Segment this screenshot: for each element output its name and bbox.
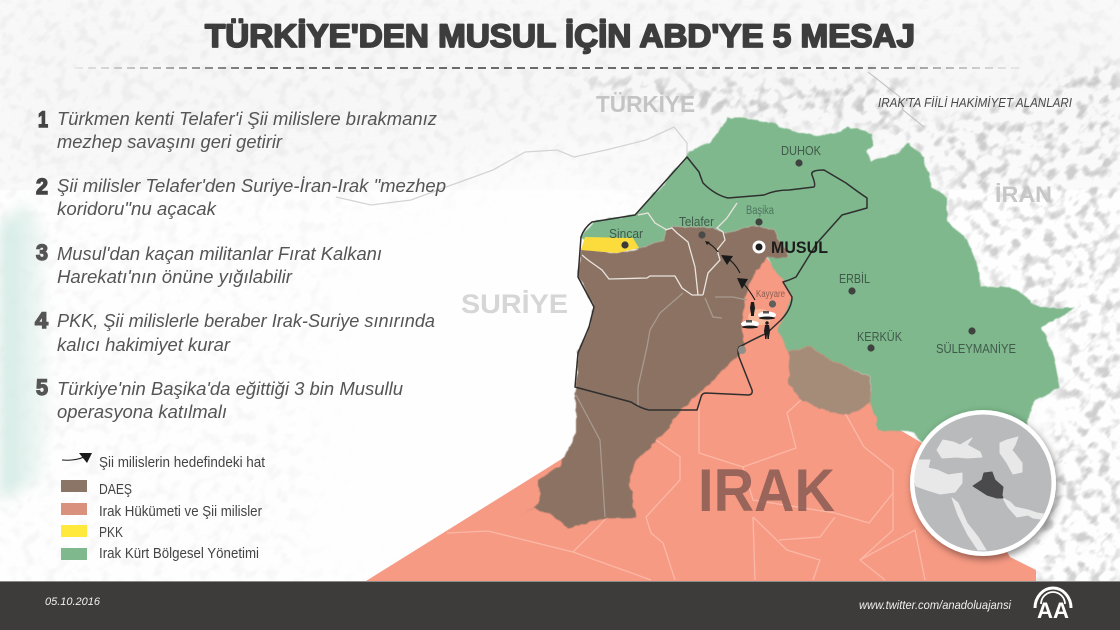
city: Duhok: DUHOK (781, 143, 821, 158)
message 2: Şii milisler Telafer'den Suriye-İran-Irak "mezhep (57, 176, 446, 196)
region: ISIS, main area (520, 225, 789, 527)
message 5: Türkiye'nin Başika'da eğittiği 3 bin Musullu (57, 379, 403, 399)
city: Kayyare: Kayyare (756, 289, 785, 300)
message 4: kalıcı hakimiyet kurar (57, 335, 231, 355)
city: Süleymaniye (936, 327, 1016, 356)
message 3: 3 (36, 240, 48, 265)
region: ISIS, southern area (789, 347, 871, 415)
Caspian Sea (1000, 437, 1022, 474)
message 3: Musul'dan kaçan militanlar Fırat Kalkanı (57, 244, 382, 264)
message 5: operasyona katılmalı (57, 402, 227, 422)
icons: soldiers and vehicles (741, 302, 776, 339)
country label: Türkiye: TÜRKİYE (596, 91, 695, 117)
city: Sincar: Sincar (609, 226, 644, 241)
city: Kayyare (756, 289, 785, 308)
date: 05.10.2016 (45, 596, 101, 608)
legend: PKK (61, 524, 123, 541)
city: Mosul: MUSUL (771, 238, 828, 257)
city: Erbil (839, 271, 870, 295)
message 1: 1 (38, 107, 48, 132)
legend: DAEŞ (61, 480, 132, 498)
footer bar (0, 581, 1120, 630)
map of Iraq (366, 118, 1074, 581)
message 4 (35, 308, 435, 355)
message 2: koridoru"nu açacak (57, 199, 217, 219)
legend: Irak government: Irak Hükümeti ve Şii milisler (99, 503, 262, 520)
roads and borders (576, 203, 747, 517)
city: Başika: Başika (746, 205, 774, 217)
message 3: Harekatı'nın önüne yığılabilir (57, 267, 293, 287)
region: PKK (581, 237, 639, 253)
locator globe (910, 410, 1056, 556)
title: TÜRKİYE'DEN MUSUL İÇİN ABD'YE 5 MESAJ (205, 18, 915, 54)
logo: Anadolu Agency (1035, 588, 1071, 623)
message 5: 5 (36, 375, 48, 400)
message 4: PKK, Şii milislerle beraber Irak-Suriye sınırında (57, 311, 435, 331)
legend: PKK: PKK (99, 524, 123, 541)
message 5 (36, 375, 403, 422)
city: Kerkük: KERKÜK (857, 329, 902, 344)
city: Erbil: ERBİL (839, 271, 870, 286)
message 1: Türkmen kenti Telafer'i Şii milislere bırakmanız (57, 109, 437, 129)
region: Kurdistan Regional Government (581, 118, 1074, 445)
legend: KRG: Irak Kürt Bölgesel Yönetimi (99, 545, 259, 562)
legend: DAEŞ: DAEŞ (99, 481, 132, 498)
map heading: IRAK'TA FİİLİ HAKİMİYET ALANLARI (878, 95, 1072, 110)
message 1 (38, 107, 437, 152)
Mediterranean Sea (914, 460, 962, 494)
front line (575, 157, 867, 410)
provincial borders (447, 400, 925, 580)
country label: Suriye: SURİYE (461, 289, 568, 319)
logo: Anadolu Agency: AA (1037, 598, 1069, 623)
arrows: Shia militia advance (705, 241, 755, 300)
message 4: 4 (35, 308, 49, 333)
Iraq highlight (973, 472, 1003, 498)
twitter url: www.twitter.com/anadoluajansi (859, 598, 1011, 612)
city: Duhok (781, 143, 821, 167)
title divider (75, 67, 1020, 69)
message 2: 2 (36, 174, 48, 199)
message 1: mezhep savaşını geri getirir (57, 132, 283, 152)
city: Başika (746, 205, 774, 226)
country label: Irak: IRAK (698, 457, 835, 524)
city: Telafer (679, 214, 715, 239)
Red Sea (952, 498, 986, 550)
Persian Gulf (1002, 498, 1044, 520)
city: Süleymaniye: SÜLEYMANİYE (936, 341, 1016, 356)
message list (35, 107, 446, 422)
map labels: cities (609, 143, 1016, 356)
city: Sincar (609, 226, 644, 249)
city: Telafer: Telafer (679, 214, 715, 229)
country label: İran: İRAN (995, 182, 1052, 207)
legend: arrow: Şii milislerin hedefindeki hat (99, 454, 266, 471)
city: Kerkük (857, 329, 902, 352)
message 3 (36, 240, 382, 287)
message 2 (36, 174, 446, 219)
legend (61, 453, 266, 562)
Black Sea (937, 438, 982, 458)
marker: gray spot (738, 346, 746, 354)
region: Iraqi government and Shia militias (366, 258, 1036, 581)
